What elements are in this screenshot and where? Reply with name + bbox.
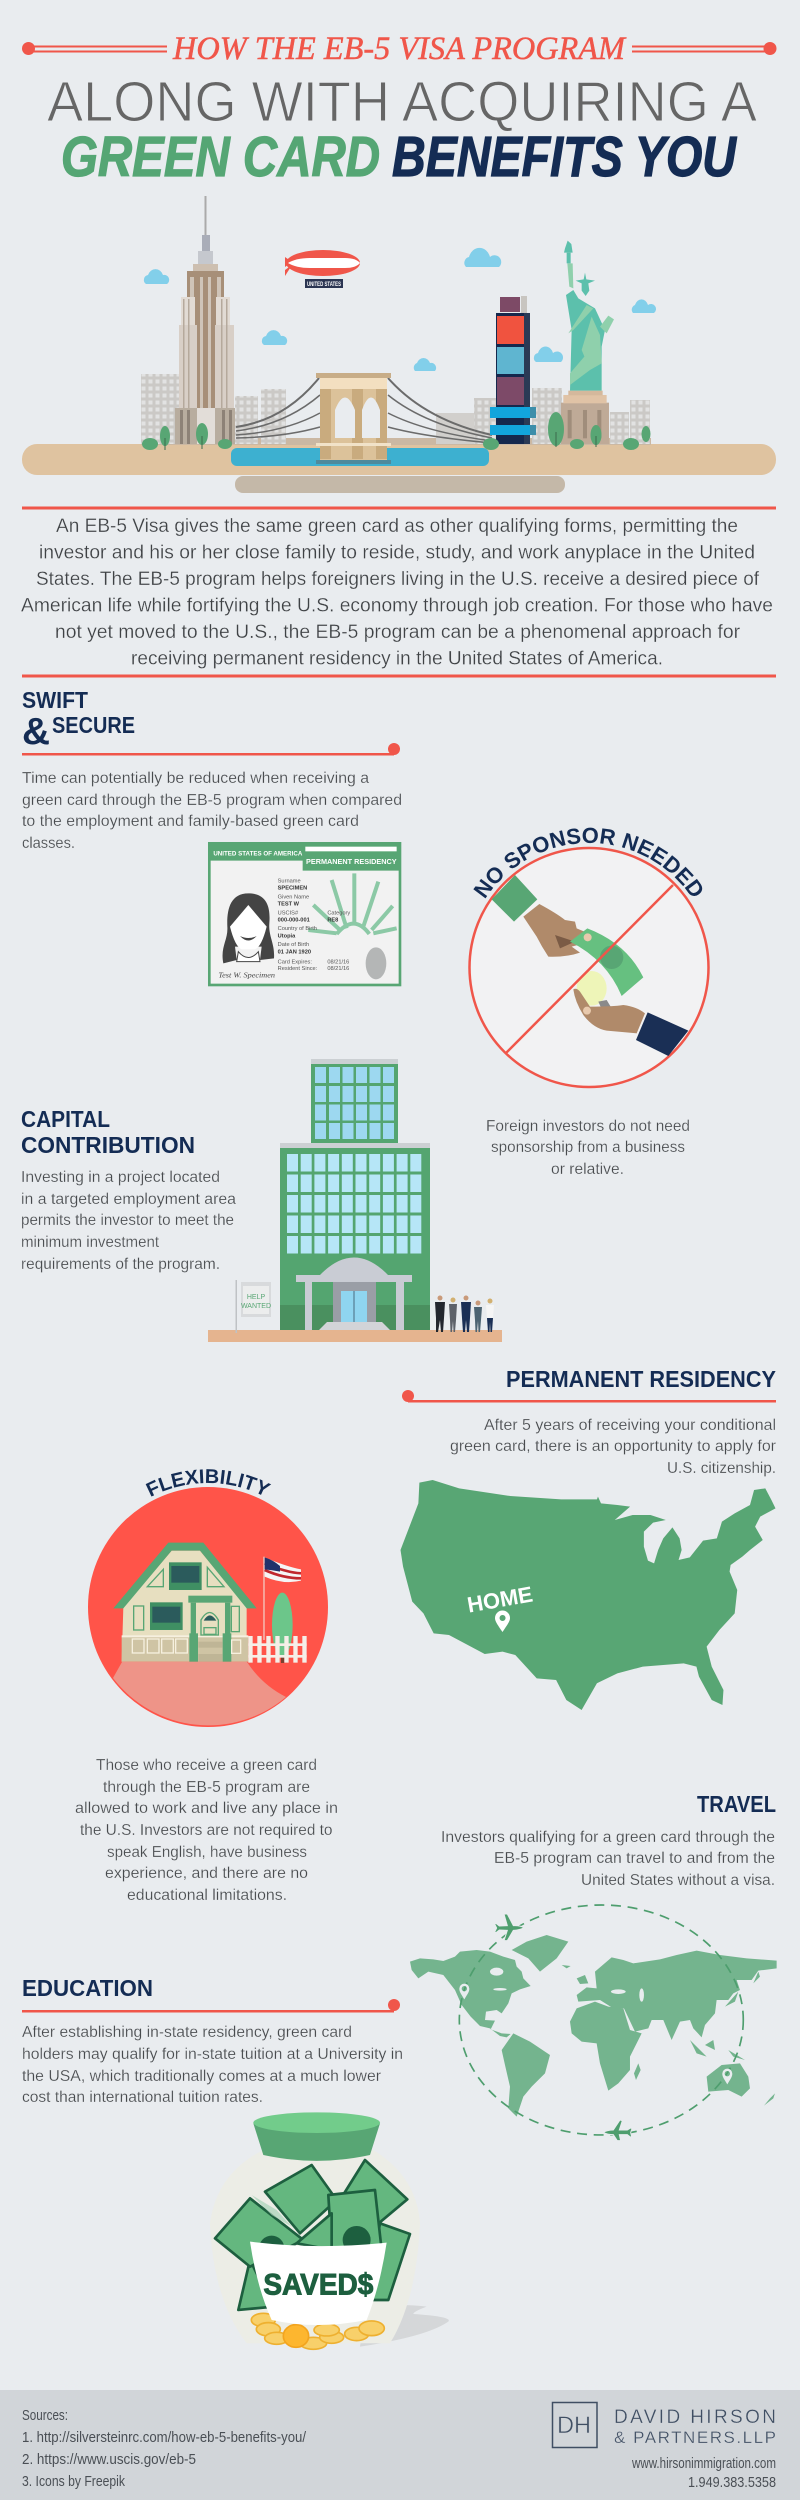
icon: green card [209,843,400,985]
text: flexibility: through the EB-5 program are [103,1779,310,1796]
icon: green card: Country of Birth [278,926,317,932]
text: flexibility: experience, and there are no [105,1865,308,1882]
text: capital contribution [21,1169,236,1273]
text: swift and secure: to the employment and family-based green card [22,813,359,830]
text: flexibility: educational limitations. [127,1887,287,1904]
title: along with acquiring a: ALONG WITH ACQUIRING A [47,70,757,134]
text: capital contribution: minimum investment [21,1234,160,1251]
text: capital contribution: in a targeted employment area [21,1191,236,1208]
text: no sponsor: Foreign investors do not need [486,1118,690,1135]
icon: trees and bushes [142,412,650,450]
text: capital contribution: requirements of the program. [21,1256,220,1273]
heading: swift and secure: & [22,711,50,753]
icon: blimp [285,250,360,288]
icon: bridge cables [236,378,492,443]
icon: money jar [210,2112,449,2349]
intro text block: receiving permanent residency in the United States of America. [131,648,663,670]
heading: capital contribution: CAPITAL [21,1106,110,1132]
text: capital contribution: Investing in a project located [21,1169,220,1186]
icon: map pin [495,1610,510,1632]
text: sources [22,2407,307,2490]
logo: David Hirson and Partners: DH [557,2412,591,2439]
icon: green card: UNITED STATES OF AMERICA [213,850,302,857]
icon: green card: Given Name [278,894,309,900]
text: no sponsor [486,1118,690,1178]
text: permanent residency: U.S. citizenship. [667,1460,776,1477]
title: green card benefits you: BENEFITS YOU [392,125,737,189]
icon: map pins [459,1984,732,2084]
icon: colorful tower [490,296,536,444]
icon: green card: SPECIMEN [278,885,307,891]
heading: swift and secure: SECURE [52,712,135,738]
text: flexibility: allowed to work and live any place in [75,1800,338,1817]
text: education: the USA, which traditionally comes at a much lower [22,2068,382,2085]
icon: green card: Card Expires: [278,959,312,965]
heading: permanent residency: PERMANENT RESIDENCY [506,1366,776,1392]
illustration: New York skyline [22,196,776,493]
icon: green card: Resident Since: [278,966,318,972]
heading: no sponsor needed: NO SPONSOR NEEDED [473,828,702,898]
icon: house in red circle [88,1487,328,1727]
icon: green card: 08/21/16 [327,959,349,965]
heading: capital contribution: CONTRIBUTION [21,1132,195,1158]
text: permanent residency: green card, there is an opportunity to apply for [450,1438,777,1455]
icon: help wanted sign [236,1280,271,1333]
text: sources: 2. https://www.uscis.gov/eb-5 [22,2451,196,2468]
text: permanent residency: After 5 years of receiving your conditional [484,1417,776,1434]
icon: green card: TEST W [278,901,300,907]
text: no sponsor: sponsorship from a business [491,1139,685,1156]
label: home: HOME [465,1581,535,1618]
intro text block: An EB-5 Visa gives the same green card as other qualifying forms, permitting the [56,516,738,537]
text: travel: EB-5 program can travel to and from the [494,1850,775,1867]
icon: green card: 08/21/16 [327,966,349,972]
icon: Empire State Building [175,196,235,444]
footer panel [0,2390,800,2500]
text: flexibility: Those who receive a green card [96,1757,317,1774]
text: swift and secure: green card through the EB-5 program when compared [22,792,402,809]
text: education: After establishing in-state residency, green card [22,2024,352,2041]
text: education [22,2024,403,2106]
icon: help wanted sign: WANTED [241,1303,271,1310]
icon: plane bottom [603,2120,632,2141]
map: world with flight path [410,1905,777,2141]
logo: David Hirson and Partners: DAVID HIRSON [614,2407,776,2428]
icon: help wanted sign: HELP [247,1294,265,1301]
map: United States [401,1480,776,1710]
text: permanent residency [450,1417,777,1477]
title: green card benefits you: GREEN CARD [61,125,380,189]
intro text block: not yet moved to the U.S., the EB-5 program can be a phenomenal approach for [55,622,741,643]
text: travel: United States without a visa. [581,1872,775,1889]
heading: permanent residency [402,1366,776,1402]
icon: blimp: UNITED STATES [307,281,341,288]
icon: green card: Date of Birth [278,942,309,948]
logo: David Hirson and Partners: & PARTNERS.LLP [614,2428,776,2447]
icon: green card: RE8 [327,917,338,923]
heading: swift and secure [22,687,400,756]
icon: green card: Utopia [278,933,296,939]
icon: plane top [495,1914,524,1941]
text: swift and secure: classes. [22,835,75,852]
text: website and phone [631,2455,776,2491]
icon: Statue of Liberty [561,241,614,444]
icon: clouds [144,248,656,371]
intro text block: American life while fortifying the U.S. economy through job creation. For those who have [21,596,773,616]
heading: swift and secure: SWIFT [22,687,88,713]
text: swift and secure [22,770,402,852]
icon: green card: Category [327,910,350,916]
text: flexibility: the U.S. Investors are not required to [80,1822,333,1839]
text: travel [441,1829,775,1889]
background buildings [141,374,650,444]
icon: green card: Test W. Specimen [218,970,275,979]
intro text block: States. The EB-5 program helps foreigners living in the U.S. receive a desired piece of [36,569,760,590]
icon: office building [208,1059,502,1342]
heading: education [22,1975,400,2012]
text: website and phone: 1.949.383.5358 [688,2474,776,2491]
title: green card benefits you [61,125,737,189]
icon: Brooklyn Bridge tower [316,373,391,460]
heading: education: EDUCATION [22,1975,153,2001]
heading: flexibility: FLEXIBILITY [146,1469,272,1496]
icon: river [231,448,489,466]
text: travel: Investors qualifying for a green card through the [441,1829,775,1846]
text: flexibility: speak English, have business [107,1844,307,1861]
text: education: cost than international tuition rates. [22,2089,263,2106]
text: education: holders may qualify for in-state tuition at a University in [22,2046,403,2063]
text: flexibility [75,1757,338,1904]
text: no sponsor: or relative. [551,1161,624,1178]
intro text block [21,506,776,678]
ground [22,438,776,493]
title: how the EB-5 visa program [22,31,776,67]
icon: green card: Surname [278,879,301,885]
text: sources: Sources: [22,2407,68,2424]
heading: travel: TRAVEL [697,1791,776,1817]
title: how the EB-5 visa program: HOW THE EB-5 VISA PROGRAM [172,31,626,67]
intro text block: investor and his or her close family to reside, study, and work anyplace in the United [39,542,755,564]
icon: green card: PERMANENT RESIDENCY [306,857,397,866]
icon: line of people [435,1296,494,1332]
icon: green card: USCIS# [278,910,299,916]
text: sources: 1. http://silversteinrc.com/how-eb-5-benefits-you/ [22,2429,307,2446]
heading: capital contribution [21,1106,195,1158]
icon: green card: 000-000-001 [278,917,310,923]
text: swift and secure: Time can potentially be reduced when receiving a [22,770,369,787]
logo: David Hirson and Partners [552,2402,776,2448]
icon: green card: 01 JAN 1920 [278,949,311,955]
text: capital contribution: permits the investor to meet the [21,1212,234,1229]
label: saved$: SAVED$ [263,2268,374,2301]
icon: no sponsor needed [468,828,710,1088]
text: sources: 3. Icons by Freepik [22,2473,125,2490]
